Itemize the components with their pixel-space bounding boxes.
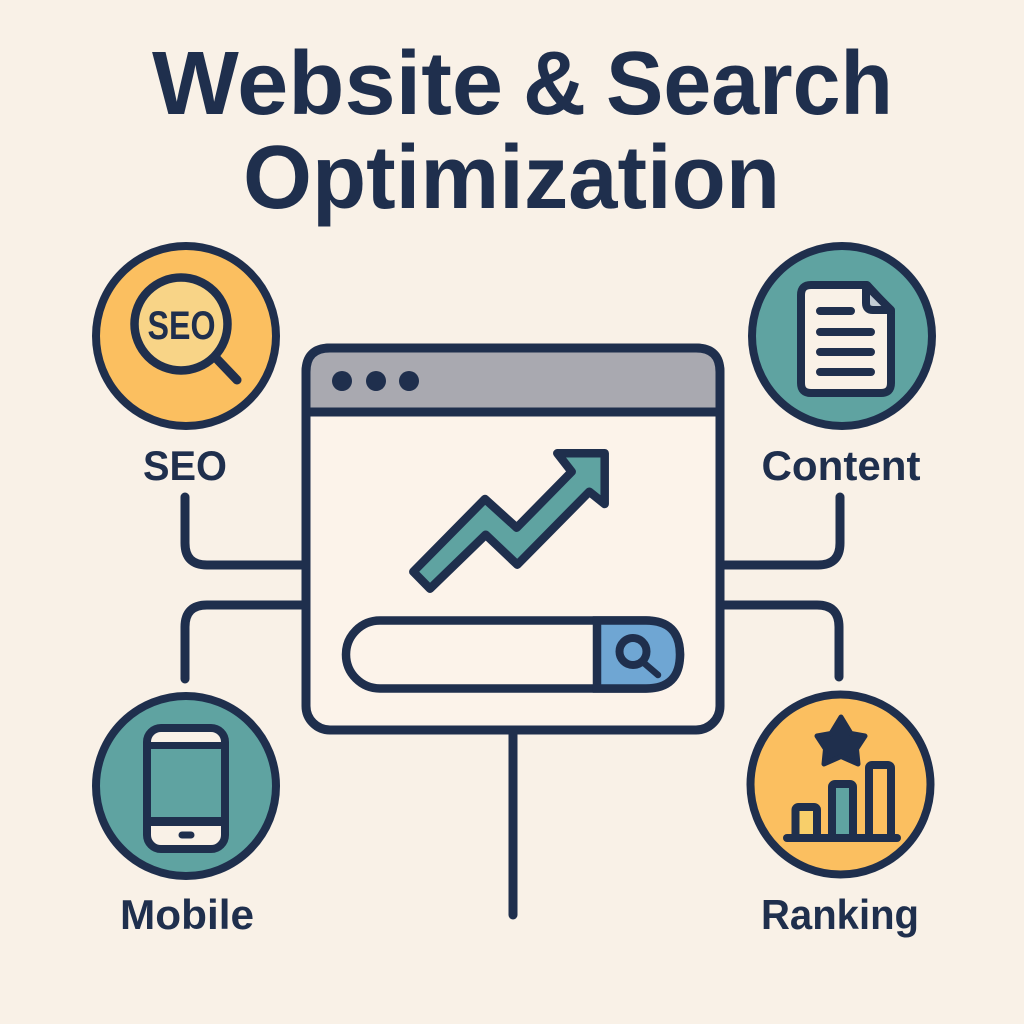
- title: &: [523, 34, 586, 134]
- icon: search magnifier: [620, 638, 658, 675]
- label: Mobile: Mobile: [120, 891, 254, 938]
- browser title bar: [306, 348, 720, 412]
- window dots: [332, 371, 419, 391]
- icon: ranking: [750, 694, 930, 874]
- search bar: [346, 620, 680, 688]
- title: Website: [152, 34, 503, 134]
- label: SEO: SEO: [143, 442, 227, 489]
- icon: rising arrow: [413, 453, 605, 589]
- icon: content document: [752, 246, 932, 426]
- icon: SEO: SEO: [148, 304, 216, 348]
- icon: SEO: [96, 246, 276, 426]
- title: Search: [606, 34, 893, 134]
- icon: mobile phone: [96, 696, 276, 876]
- label: Ranking: Ranking: [761, 891, 919, 938]
- panel: browser window: [306, 348, 720, 730]
- label: Content: Content: [762, 442, 921, 489]
- title: Optimization: [243, 128, 780, 228]
- connector lines: [185, 497, 840, 915]
- title: [152, 34, 893, 228]
